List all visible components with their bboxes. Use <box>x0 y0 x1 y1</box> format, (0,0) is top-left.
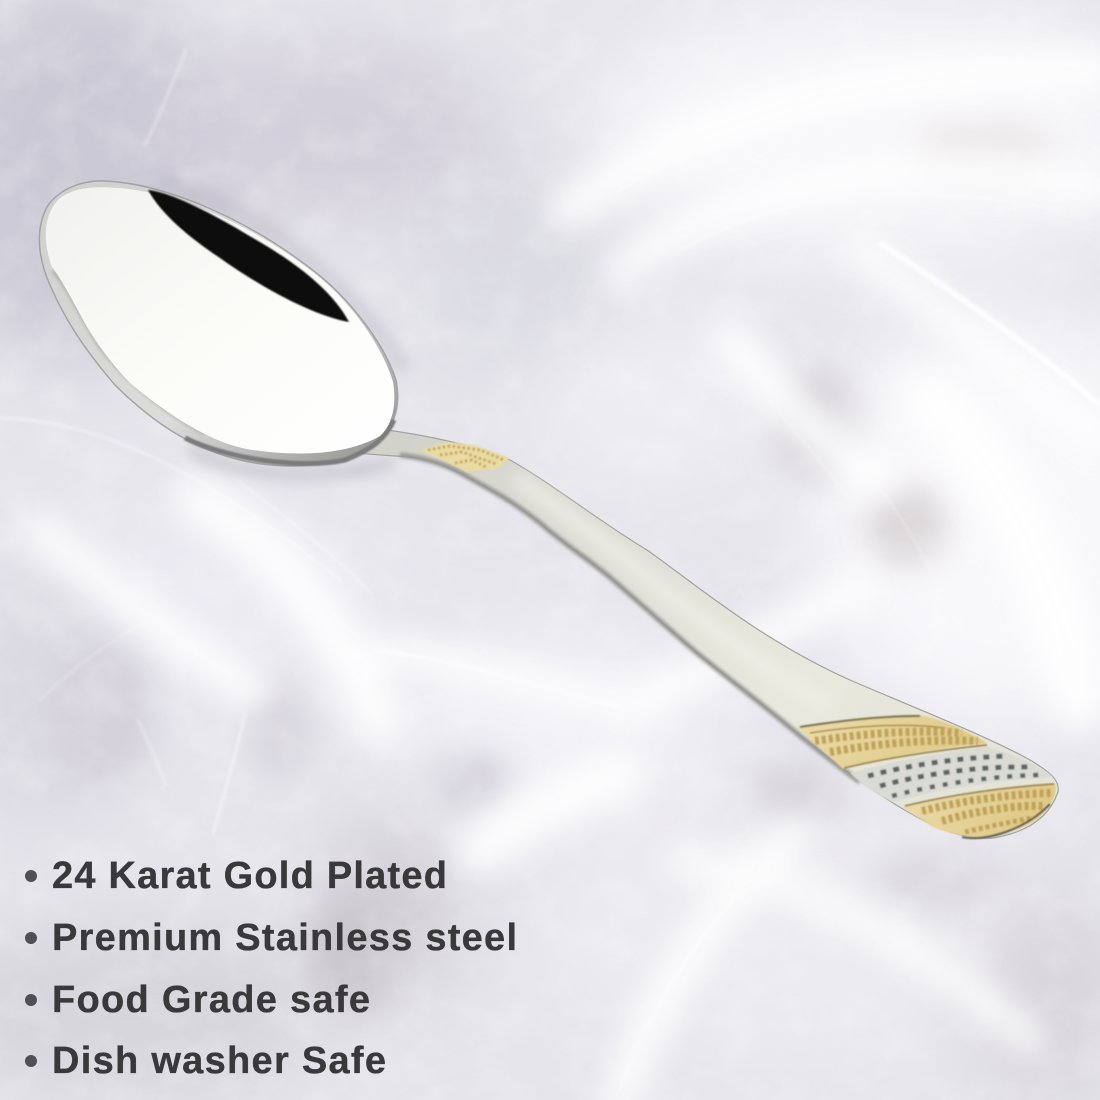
handle <box>340 425 1058 838</box>
handle lower shading <box>400 455 860 782</box>
handle end gold band lower <box>903 783 1056 838</box>
bowl rim <box>39 181 398 466</box>
bullet: Food Grade safe: Food Grade safe <box>52 979 370 1021</box>
bowl left crescent <box>54 270 205 432</box>
handle centre sheen <box>515 478 830 706</box>
bowl upper shadow <box>160 185 405 370</box>
bowl dark lower rim <box>185 420 394 464</box>
feature list <box>25 855 517 1082</box>
bullet: 24 Karat Gold Plated: 24 Karat Gold Plated <box>52 855 447 897</box>
handle end silver pattern <box>850 747 1053 802</box>
bullet: Premium Stainless steel: Premium Stainless steel <box>52 917 517 959</box>
bowl inner highlight <box>46 187 394 453</box>
bullet: Dish washer Safe: Dish washer Safe <box>52 1040 386 1082</box>
neck gold band <box>420 442 510 472</box>
darker feather gaps <box>45 120 1055 1015</box>
spoon <box>39 181 1058 838</box>
bowl bottom shadow <box>190 450 395 474</box>
handle end gold band upper <box>797 715 987 769</box>
bowl dark reflection <box>148 190 349 322</box>
